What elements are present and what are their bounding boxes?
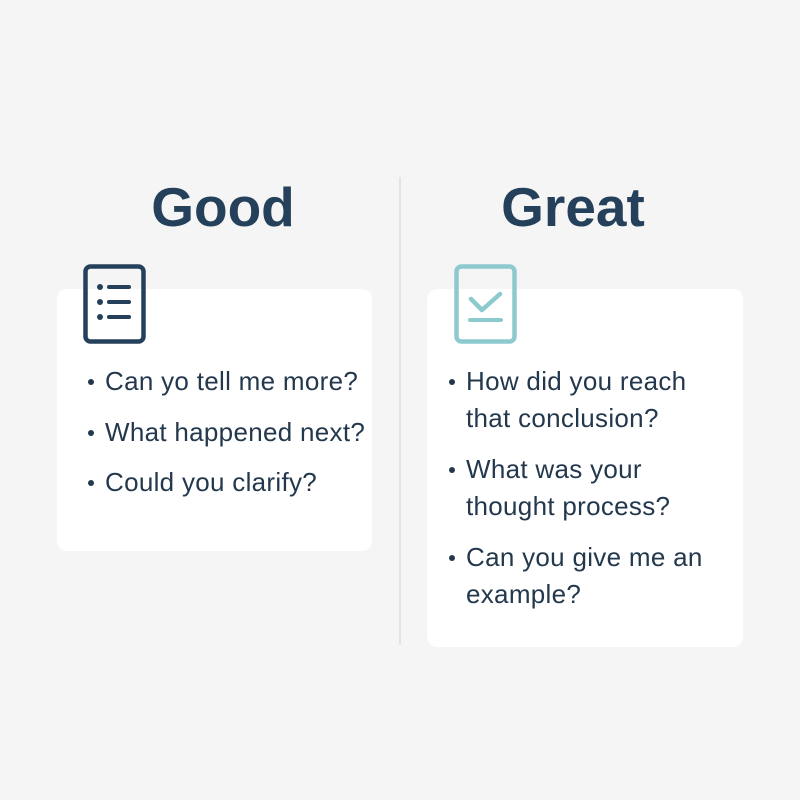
panel: good: What happened next? <box>105 417 365 447</box>
great questions list <box>449 366 703 609</box>
panel: great: Can you give me an <box>466 542 703 572</box>
panel: great <box>427 289 743 647</box>
panel: good <box>57 289 372 551</box>
panel: great: example? <box>466 579 581 609</box>
panel: great: thought process? <box>466 491 670 521</box>
icon: check document <box>454 264 517 344</box>
divider <box>399 177 401 645</box>
panel: great: How did you reach <box>466 366 686 396</box>
panel: good: Can yo tell me more? <box>105 366 358 396</box>
panel: good: Could you clarify? <box>105 467 317 497</box>
panel: great: that conclusion? <box>466 403 659 433</box>
icon: list document <box>83 264 146 344</box>
good questions list <box>88 366 365 497</box>
panel: great: What was your <box>466 454 642 484</box>
title: Good: Good <box>151 176 295 238</box>
title: Great: Great <box>501 176 645 238</box>
